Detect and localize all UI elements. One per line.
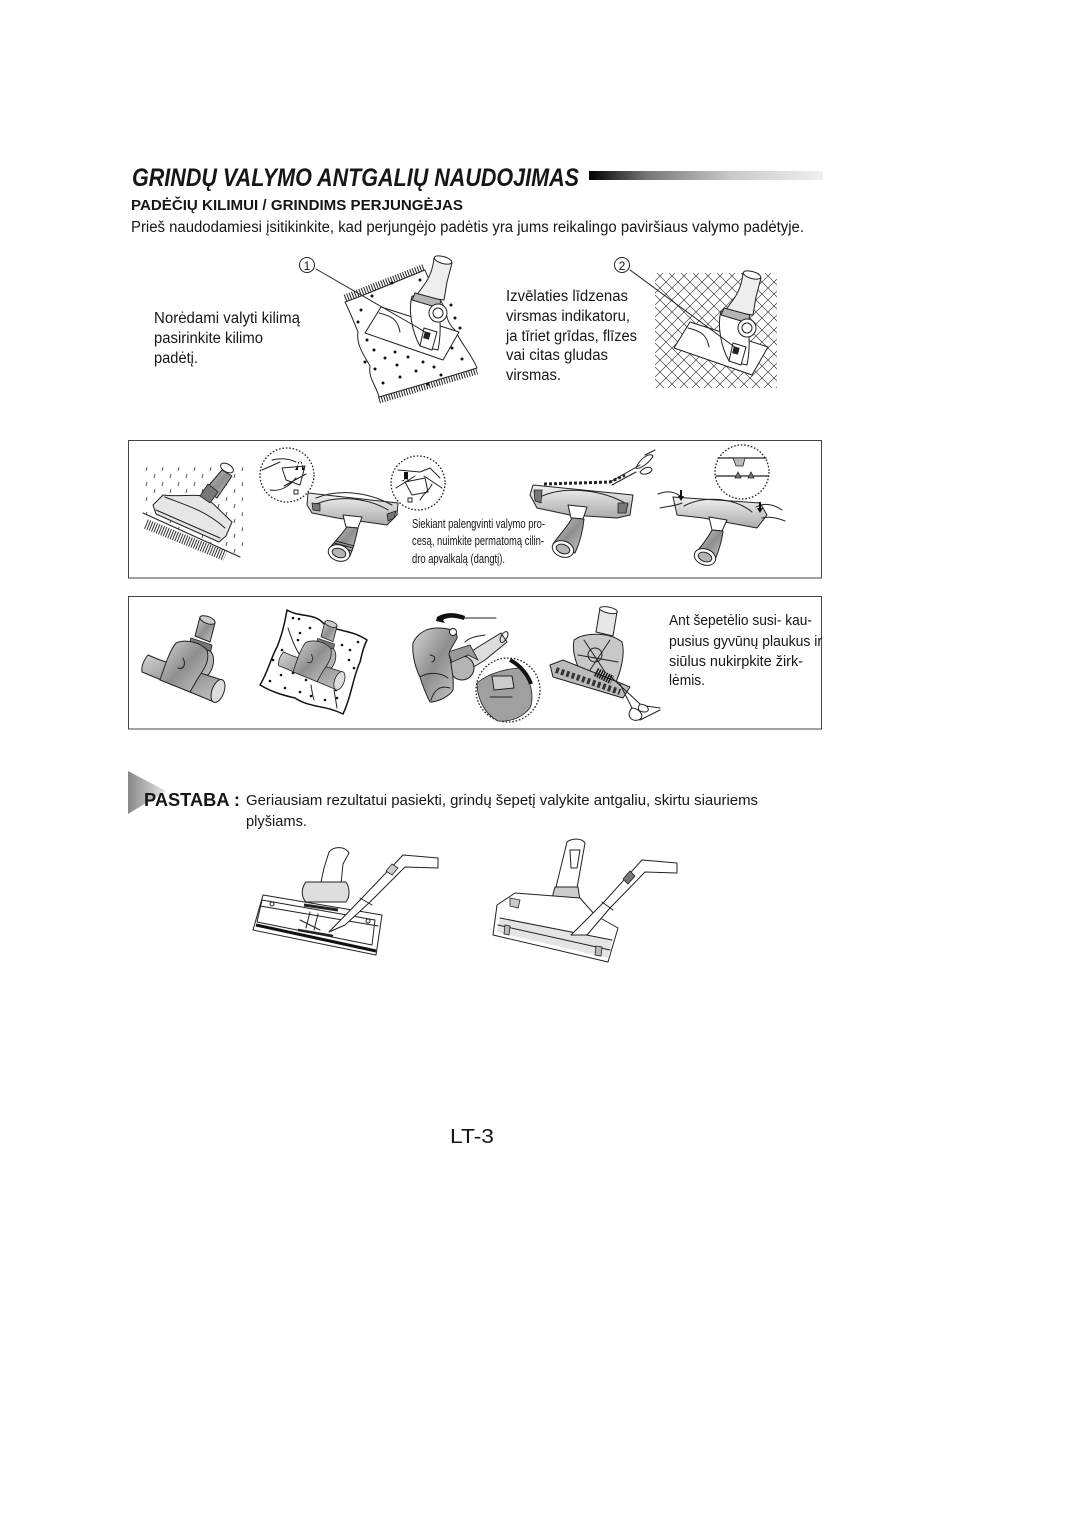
smooth floor instruction text: virsmas indikatoru, xyxy=(506,308,630,325)
arrow: turn direction xyxy=(436,613,465,623)
illustration: nozzle on hard floor xyxy=(655,269,777,388)
intro text: Prieš naudodamiesi įsitikinkite, kad perjungėjo padėtis yra jums reikalingo paviršiaus valymo padėtyje. xyxy=(131,219,804,236)
illustration: crevice tool on nozzle top xyxy=(253,848,438,955)
note text: Geriausiam rezultatui pasiekti, grindų šepetį valykite antgaliu, skirtu siauriems xyxy=(246,792,758,809)
illustration: cutting hair with scissors xyxy=(530,450,655,560)
carpet instruction text xyxy=(154,310,300,367)
page number: LT-3 xyxy=(450,1126,494,1148)
illustration: crevice tool on nozzle underside xyxy=(493,839,677,962)
subheading: PADĖČIŲ KILIMUI / GRINDIMS PERJUNGĖJAS xyxy=(131,196,463,214)
smooth floor instruction text: vai citas gludas xyxy=(506,347,608,364)
carpet instruction text: padėtį. xyxy=(154,350,198,367)
callout number 1 xyxy=(300,258,427,333)
panel: removing cover xyxy=(128,440,822,578)
callout number 1: 1 xyxy=(304,259,311,273)
carpet instruction text: Norėdami valyti kilimą xyxy=(154,310,300,327)
illustration: cutting threads on turbo brush xyxy=(550,605,660,720)
smooth floor instruction text xyxy=(505,288,637,384)
illustration: nozzle underside with release clips xyxy=(260,448,445,564)
illustration: turbo brush on rug xyxy=(260,610,367,714)
turbo brush instruction text: siūlus nukirpkite žirk- xyxy=(669,654,803,670)
small instruction text: cesą, nuimkite permatomą cilin- xyxy=(412,534,544,548)
title: GRINDŲ VALYMO ANTGALIŲ NAUDOJIMAS xyxy=(132,164,579,192)
illustration: nozzle on carpet edge xyxy=(143,461,243,557)
smooth floor instruction text: Izvēlaties līdzenas xyxy=(506,288,628,305)
turbo brush instruction text xyxy=(669,613,822,689)
smooth floor instruction text: ja tīriet grīdas, flīzes xyxy=(505,328,637,345)
small instruction text xyxy=(412,517,545,566)
callout number 2 xyxy=(614,258,736,348)
note icon: gradient triangle xyxy=(128,771,166,814)
turbo brush instruction text: lėmis. xyxy=(669,673,705,689)
callout number 2: 2 xyxy=(619,259,626,273)
turbo brush instruction text: Ant šepetėlio susi- kau- xyxy=(669,613,812,629)
small instruction text: Siekiant palengvinti valymo pro- xyxy=(412,517,545,531)
note label: PASTABA : xyxy=(144,790,240,810)
detail circle: latch xyxy=(476,658,540,722)
illustration: refitting cover xyxy=(658,445,785,568)
smooth floor instruction text: virsmas. xyxy=(506,367,561,384)
illustration: opening brush cover xyxy=(413,613,540,722)
illustration: nozzle on carpet xyxy=(345,254,477,400)
turbo brush instruction text: pusius gyvūnų plaukus ir xyxy=(669,634,822,650)
note text xyxy=(246,792,758,830)
illustration: turbo brush xyxy=(142,614,228,704)
panel: turbo brush xyxy=(128,596,822,729)
small instruction text: dro apvalkalą (dangtį). xyxy=(412,552,505,566)
note text: plyšiams. xyxy=(246,813,307,830)
carpet instruction text: pasirinkite kilimo xyxy=(154,330,263,347)
title gradient bar xyxy=(589,171,823,180)
